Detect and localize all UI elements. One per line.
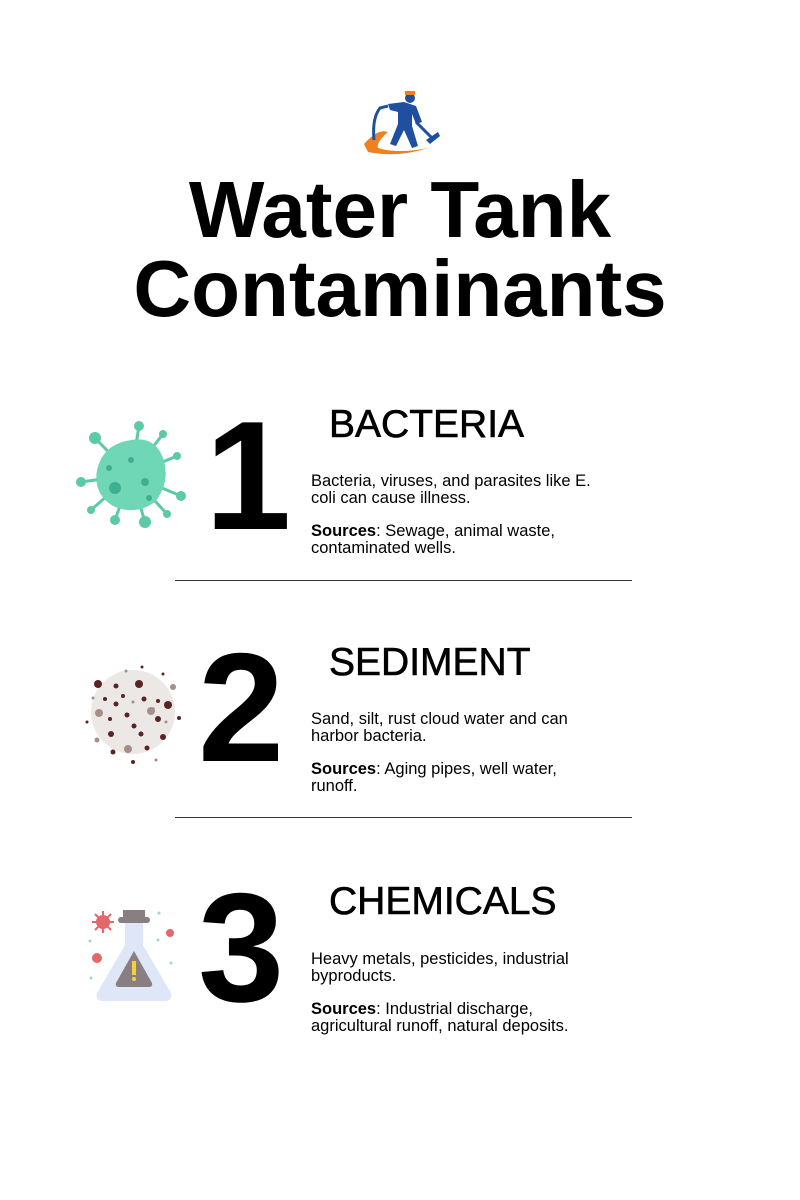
heading: chemicals: CHEMICALS bbox=[329, 880, 557, 923]
number 1: 1 bbox=[205, 389, 291, 562]
title: Water Tank bbox=[189, 165, 611, 254]
number 2: 2 bbox=[198, 621, 284, 794]
text: sediment: Sand, silt, rust cloud water and can harbor bacteria. bbox=[311, 710, 568, 745]
text: chemicals: Sources: Industrial discharge, agricultural runoff, natural deposits. bbox=[311, 1000, 568, 1035]
heading: bacteria: BACTERIA bbox=[329, 403, 524, 446]
logo bbox=[364, 91, 440, 154]
text: bacteria: Sources: Sewage, animal waste, contaminated wells. bbox=[311, 522, 555, 557]
text: chemicals bbox=[311, 950, 569, 1035]
title: Contaminants bbox=[133, 244, 667, 333]
text: sediment bbox=[311, 710, 568, 795]
icon: sediment bbox=[86, 666, 181, 764]
text: bacteria: Bacteria, viruses, and parasites like E. coli can cause illness. bbox=[311, 472, 591, 507]
number 3: 3 bbox=[198, 861, 284, 1034]
icon: virus bbox=[76, 421, 186, 528]
icon: chemical flask bbox=[88, 910, 174, 1001]
text: bacteria bbox=[311, 472, 591, 557]
text: sediment: Sources: Aging pipes, well water, runoff. bbox=[311, 760, 557, 795]
text: chemicals: Heavy metals, pesticides, industrial byproducts. bbox=[311, 950, 569, 985]
title bbox=[133, 165, 667, 333]
heading: sediment: SEDIMENT bbox=[329, 641, 531, 684]
